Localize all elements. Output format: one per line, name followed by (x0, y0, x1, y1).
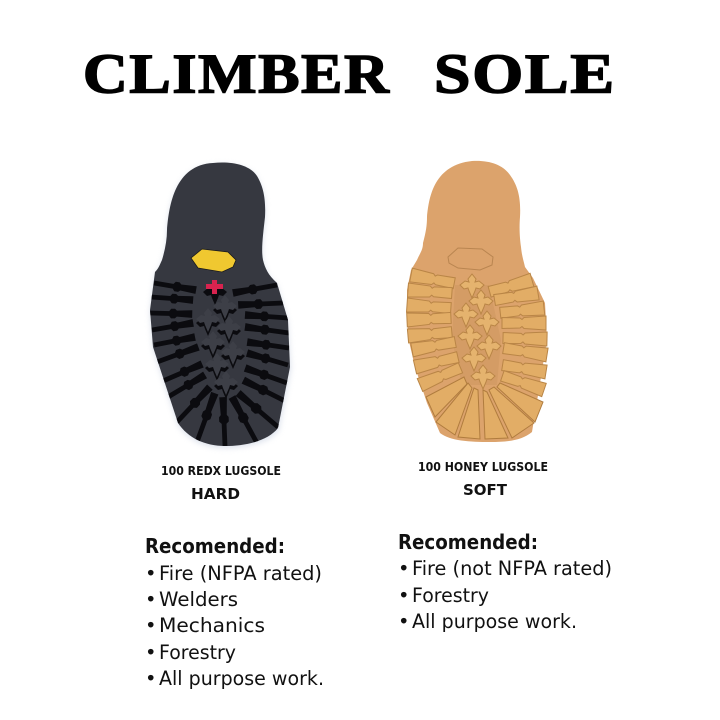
text block: hard sole recommendations: • (145, 562, 157, 585)
label: 100 REDX LUGSOLE: 100 REDX LUGSOLE (161, 464, 281, 478)
heel wedges (426, 377, 543, 439)
centre channel shading (452, 285, 501, 385)
title (83, 42, 616, 105)
text block: soft sole recommendations: • (398, 610, 410, 633)
text block: soft sole recommendations (398, 530, 612, 633)
text block: soft sole recommendations: • (398, 584, 410, 607)
text block: soft sole recommendations: Fire (not NFPA rated) (412, 557, 612, 580)
logo outline (448, 248, 493, 270)
text block: soft sole recommendations: Forestry (412, 584, 489, 607)
label: 100 HONEY LUGSOLE: 100 HONEY LUGSOLE (418, 460, 548, 474)
title: SOLE (434, 44, 616, 105)
text block: hard sole recommendations: • (145, 667, 157, 690)
centre tread crosses (454, 274, 501, 389)
panel: black REDX sole photo (150, 163, 291, 448)
panel: honey sole photo (407, 161, 548, 442)
text block: hard sole recommendations: • (145, 588, 157, 611)
title: CLIMBER (83, 42, 391, 105)
text block: hard sole recommendations: • (145, 614, 157, 637)
sole outline (407, 161, 547, 442)
label: SOFT: SOFT (463, 481, 508, 499)
side lugs (407, 268, 548, 397)
red plus lug (206, 280, 223, 294)
sole outline (150, 163, 290, 446)
yellow logo badge (191, 249, 236, 272)
label: HARD: HARD (191, 485, 240, 503)
text block: hard sole recommendations (145, 534, 324, 690)
text block: hard sole recommendations: Welders (159, 588, 238, 611)
heading: Recomended: (145, 534, 285, 558)
text block: soft sole recommendations: • (398, 557, 410, 580)
text block: hard sole recommendations: • (145, 641, 157, 664)
heading: Recomended: (398, 530, 538, 554)
text block: soft sole recommendations: All purpose work. (412, 610, 577, 633)
lug grooves (150, 278, 290, 446)
text block: hard sole recommendations: Mechanics (159, 614, 265, 637)
text block: hard sole recommendations: Forestry (159, 641, 236, 664)
text block: hard sole recommendations: All purpose work. (159, 667, 324, 690)
centre tread crosses (196, 281, 245, 399)
text block: hard sole recommendations: Fire (NFPA rated) (159, 562, 322, 585)
